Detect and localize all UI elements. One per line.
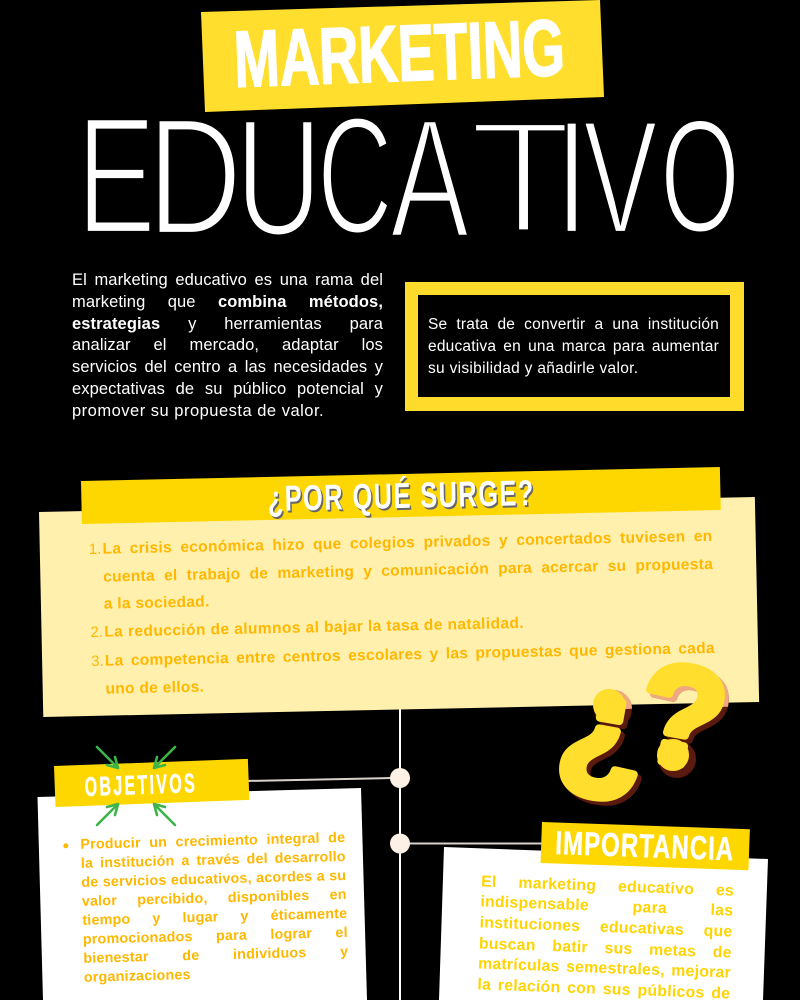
yellow framed callout: educativa en una marca para aumentar — [428, 338, 719, 355]
timeline connector — [245, 705, 545, 1000]
heading: OBJETIVOS: OBJETIVOS — [84, 768, 198, 802]
panel: objetivos text: bienestar de individuos y — [83, 944, 348, 967]
title: EDUCATIVO: A — [390, 84, 469, 274]
intro paragraph: expectativas de su público potencial y — [72, 380, 383, 398]
panel: importancia text: instituciones educativas que — [479, 914, 733, 941]
intro paragraph: marketing que combina métodos, — [72, 293, 383, 311]
panel: por qué surge: 2. — [90, 624, 103, 641]
panel background: importancia — [439, 847, 768, 1000]
panel: por qué surge: La competencia entre centros escolares y las propuestas que gestiona cada — [105, 640, 715, 670]
icon: question marks — [559, 662, 729, 806]
panel: objetivos text: promocionados para lograr el — [82, 925, 347, 948]
intro paragraph: analizar el mercado, adaptar los — [72, 336, 383, 354]
title: EDUCATIVO: V — [583, 86, 658, 268]
icon: green arrows — [97, 747, 175, 825]
panel: importancia text: El marketing educativo es — [481, 873, 734, 899]
title: EDUCATIVO: C — [317, 82, 393, 269]
panel: objetivos text: tiempo y lugar y éticamente — [82, 906, 347, 929]
title: EDUCATIVO — [76, 82, 740, 274]
intro paragraph: estrategias y herramientas para — [72, 315, 383, 333]
panel: por qué surge: cuenta el trabajo de marketing y comunicación para acercar su propuesta — [103, 555, 713, 585]
panel: por qué surge: uno de ellos. — [105, 679, 204, 698]
heading banner: importancia — [541, 822, 750, 870]
icon: question marks: ? — [627, 631, 738, 800]
panel: objetivos text: valor percibido, disponibles en — [81, 887, 346, 910]
panel: por qué surge: La crisis económica hizo que colegios privados y concertados tuviesen en — [102, 528, 713, 558]
heading: ¿POR QUÉ SURGE?: ¿POR QUÉ SURGE? — [267, 472, 535, 519]
panel: importancia text: matrículas semestrales, mejorar — [478, 956, 731, 982]
icon: question marks: ¿ — [554, 645, 665, 815]
yellow framed callout: Se trata de convertir a una institución — [428, 316, 719, 333]
panel: importancia text: indispensable para las — [480, 894, 734, 920]
icon: question marks: ? — [631, 635, 742, 804]
heading banner: objetivos — [54, 759, 249, 807]
panel: objetivos text: de servicios educativos, acordes a su — [81, 868, 346, 891]
yellow framed callout: su visibilidad y añadirle valor. — [428, 360, 638, 377]
heading: ¿POR QUÉ SURGE?: ¿POR QUÉ SURGE? — [269, 474, 537, 521]
panel: por qué surge: 1. — [89, 541, 101, 558]
title: EDUCATIVO: U — [235, 83, 322, 271]
title: EDUCATIVO: D — [147, 83, 242, 270]
panel: importancia text: buscan batir sus metas de — [479, 935, 732, 961]
heading: IMPORTANCIA: IMPORTANCIA — [555, 824, 735, 867]
title: EDUCATIVO: E — [76, 82, 156, 269]
title: EDUCATIVO: I — [555, 88, 588, 268]
title banner: MARKETING — [201, 0, 604, 112]
title: EDUCATIVO: O — [660, 85, 740, 267]
heading: ¿POR QUÉ SURGE? — [267, 472, 537, 521]
icon: question marks: ¿ — [550, 641, 661, 811]
intro paragraph: promover su propuesta de valor. — [72, 402, 324, 420]
intro paragraph — [72, 271, 383, 420]
panel background: objetivos — [38, 788, 367, 1000]
panel: objetivos text: organizaciones — [83, 967, 190, 986]
panel: por qué surge: a la sociedad. — [104, 594, 210, 613]
panel: por qué surge: 3. — [91, 653, 104, 670]
panel: objetivos text: la institución a través del desarrollo — [80, 849, 345, 872]
panel: objetivos text — [63, 830, 348, 986]
intro paragraph: servicios del centro a las necesidades y — [72, 358, 383, 376]
intro paragraph: El marketing educativo es una rama del — [72, 271, 383, 289]
heading banner: por qué surge — [80, 467, 720, 524]
title: EDUCATIVO: T — [468, 86, 579, 268]
title banner: MARKETING: MARKETING — [232, 3, 566, 104]
yellow framed callout — [405, 282, 744, 411]
panel: por qué surge — [39, 497, 759, 717]
panel: importancia text — [477, 873, 734, 1000]
panel: por qué surge: La reducción de alumnos al bajar la tasa de natalidad. — [104, 615, 524, 641]
panel: objetivos text: Producir un crecimiento integral de — [80, 830, 345, 853]
icon: question marks: ¿ — [554, 645, 665, 815]
icon: question marks: ? — [631, 635, 742, 804]
